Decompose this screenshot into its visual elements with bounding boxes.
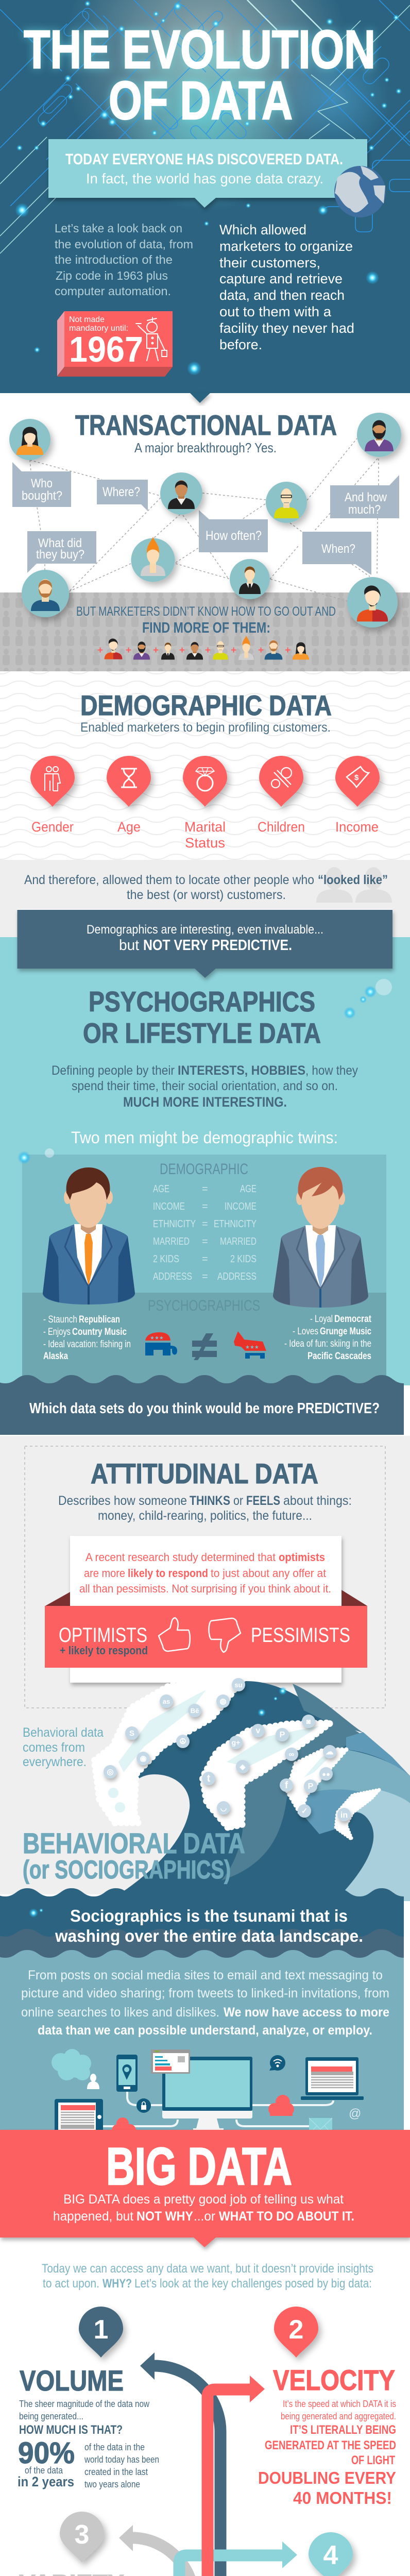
red band: optimists vs pessimists: OPTIMISTS [59,1624,147,1647]
speech bubble: and how much: much? [348,503,381,517]
pin: 1: 1 [94,2315,108,2345]
icon: at sign: @ [349,2107,361,2121]
subheading: A major breakthrough? Yes. [134,440,277,455]
row of people with plus signs: + [126,645,131,656]
icon pin: gender [30,756,75,807]
social icon glyphs: f [285,1780,288,1791]
pin: 4 [309,2532,353,2576]
text block: behavioral data comes from everywhere [23,1725,104,1769]
callout: 1967 box: Not made [69,315,105,324]
icon: lock [136,2098,151,2113]
icon: red cloud right [268,2095,294,2116]
illustration: connected devices [52,2049,364,2137]
text block: intro left: Zip code in 1963 plus [56,269,168,282]
list: right man: - Idea of fun: skiing in the [284,1338,371,1349]
block: volume: of the data [25,2465,63,2476]
headline [55,1906,363,1945]
list: left man: - Staunch [43,1314,77,1325]
text block: THINKS [190,1494,230,1508]
social icon glyphs: ◈ [240,1762,246,1771]
demographic table: DEMOGRAPHIC [160,1161,248,1178]
row of people with plus signs: + [179,645,185,656]
social icon glyphs: in [340,1811,348,1820]
title: OF DATA [109,71,293,131]
figure: left man [43,1167,135,1304]
text block: about things: [283,1494,352,1508]
title [24,20,375,131]
arrows: four branching routes [119,2352,297,2576]
callout: today everyone has discovered data: In fact, the world has gone data crazy. [86,171,323,187]
text block: intro left: Let’s take a look back on [55,222,182,235]
speech bubble: where: Where? [102,485,140,499]
demographic table: ETHNICITY [153,1218,196,1230]
connectors [102,2092,333,2126]
person: bearded purple [357,413,401,457]
callout: 1967 box: 1967 [69,329,143,369]
pin: 1 [79,2307,123,2358]
text block: key challenges: to act upon. [43,2277,99,2291]
row of people with plus signs [97,636,309,660]
heading: behavioral data: BEHAVIORAL DATA [23,1827,245,1859]
study text: A recent research study determined that [86,1551,276,1564]
icon: thumb up [159,1618,190,1651]
icon: envelope [309,2118,332,2134]
white card [70,1536,341,1683]
text block: key challenges: WHY? [102,2277,132,2291]
demographic table: INCOME [225,1201,257,1212]
icon: elephant: ★★★ [150,1335,164,1341]
block: velocity [258,2364,396,2507]
block: volume: 90% [18,2436,75,2470]
foam [94,1680,379,1839]
pin: 3: 3 [75,2520,89,2550]
heading: DEMOGRAPHIC DATA [80,689,332,721]
text block: intro right [219,222,354,352]
headline: washing over the entire data landscape. [55,1926,363,1945]
social icon glyphs: ◎ [107,1768,114,1776]
icon: elephant [145,1332,177,1355]
text block: key challenges [42,2262,373,2291]
study text [79,1551,331,1595]
speech bubble: when: When? [321,542,355,556]
demographic table: = [202,1218,208,1230]
text block: NOT WHY [136,2209,193,2224]
text block: intro right: out to them with a [219,304,332,319]
text block: behavioral data comes from everywhere: comes from [23,1740,85,1755]
subheading: Enabled marketers to begin profiling customers. [80,720,331,735]
pin: 3 [60,2512,104,2563]
social icon glyphs: ◉ [140,1754,147,1763]
list: right man: Grunge Music [320,1326,371,1337]
figure: right man [273,1167,368,1308]
row of people with plus signs: + [205,645,211,656]
study text: to just about any offer at [211,1567,326,1580]
block: volume: two years alone [84,2479,140,2489]
demographic table: = [202,1236,208,1247]
list: left man: - Ideal vacation: fishing in [43,1339,131,1350]
social icon glyphs: ●● [322,1770,330,1778]
list: left man: Country Music [72,1327,127,1337]
social icon glyphs: ✓ [301,1807,308,1816]
row of people with plus signs: + [153,645,159,656]
block: velocity: OF LIGHT [351,2453,395,2467]
list: left man: - Enjoys [43,1327,71,1337]
person: orange hair [131,537,175,582]
icon: chat cloud [52,2049,91,2080]
psychographics label: PSYCHOGRAPHICS [148,1297,260,1314]
callout: 1967 box [57,311,173,377]
person: black suit [230,559,270,599]
demographic table: MARRIED [220,1236,257,1247]
heading: BIG DATA [106,2137,292,2196]
panel: psychographics background [0,937,410,1385]
panel: looked like [0,860,410,937]
text block: And therefore, allowed them to locate other people who [24,873,314,887]
demographic table: 2 KIDS [230,1253,257,1265]
row of people with plus signs: + [97,645,103,656]
panel: twins comparison [18,1148,386,1385]
icon: monitor [162,2057,252,2130]
block: volume: The sheer magnitude of the data now [19,2398,150,2409]
social icon glyphs: ∞ [289,1750,295,1759]
text block [53,2192,354,2224]
person: bald yellow [266,482,307,523]
speech bubble: what did they buy: What did [38,536,82,550]
illustration: tsunami wave [94,1678,410,1901]
text block: key challenges: Let’s look at the key challenges posed by big data: [134,2277,372,2291]
text block: data than we can possible understand, analyze, or employ. [38,2023,372,2038]
text block: defining people: MUCH MORE INTERESTING. [123,1094,287,1110]
panel: attitudinal data [0,1436,410,1894]
glow dots [344,979,392,1019]
row of people with plus signs: + [258,645,264,656]
labels: Gender [31,819,74,835]
social icon glyphs [107,1681,348,1820]
text block: “looked like” [318,873,388,887]
text block: defining people [52,1063,358,1110]
text block [21,1968,389,2038]
demographic table [153,1161,257,1282]
demographic table: ADDRESS [217,1271,257,1282]
speech bubble: where [97,480,148,511]
pin: 2 [274,2307,318,2358]
icon: thumb down [209,1618,241,1652]
text block: intro right: Which allowed [219,222,306,238]
pin: 2: 2 [289,2315,303,2345]
text block: find more of them [76,604,336,636]
text block: WHAT TO DO ABOUT IT. [219,2209,354,2224]
text block: intro left: computer automation. [55,284,171,298]
icon pin: marital status [183,756,227,807]
callout: not very predictive: but [119,937,139,954]
text block: ...or [194,2209,215,2224]
labels: Children [258,819,305,835]
red band: optimists vs pessimists: + likely to respond [60,1644,148,1657]
list: right man: - Loves [293,1326,318,1337]
text block: the best (or worst) customers. [127,888,286,902]
callout: not very predictive [17,909,392,978]
text block: intro right: facility they never had [219,320,354,336]
list: left man: Alaska [43,1351,68,1362]
social icon glyphs: ◙ [306,1717,311,1725]
speech bubble: when [302,532,371,575]
list: left man: Republican [79,1314,120,1325]
demographic table: = [202,1271,208,1282]
social icon glyphs: P [308,1782,314,1791]
text block: find more of them: BUT MARKETERS DIDN’T KNOW HOW TO GO OUT AND [76,604,336,619]
icon: browser window [151,2049,190,2074]
demographic table: ETHNICITY [214,1218,257,1230]
speech bubble: who bought: bought? [22,489,62,503]
study text: optimists [279,1551,325,1564]
arrow: velocity [208,2376,265,2576]
text block: intro right: their customers, [219,255,320,270]
callout: 1967 box: mandatory until: [69,324,128,333]
callout: today everyone has discovered data: TODAY EVERYONE HAS DISCOVERED DATA. [65,151,343,168]
block: volume: in 2 years [18,2474,74,2489]
speech bubble: and how much [330,475,399,518]
social icon glyphs: P [280,1731,285,1739]
icon: not equal [192,1333,217,1360]
demographic table: = [202,1253,208,1265]
labels: Income [335,819,379,835]
text block: From posts on social media sites to email and text messaging to [28,1968,383,1982]
social icon glyphs: su [234,1681,243,1689]
person: red sweater [347,577,398,628]
text block: picture and video sharing; from tweets to linked-in invitations, from [21,1986,389,2001]
block: volume: created in the last [84,2467,148,2477]
icon: person [87,2074,99,2089]
social icon glyphs: ◍ [219,1697,227,1706]
social icon glyphs: ◡ [220,1804,227,1812]
social icon glyphs: g+ [232,1738,240,1747]
icon: red cloud left [112,2117,136,2137]
callout: not very predictive: Demographics are interesting, even invaluable... [87,923,323,937]
speech bubble: how often [199,510,268,552]
list: left man [43,1314,131,1362]
labels: Age [117,819,141,835]
demographic table: 2 KIDS [153,1253,179,1265]
pin: 4: 4 [323,2540,338,2570]
text block: defining people: spend their time, their social orientation, and so on. [72,1079,338,1093]
demographic table: AGE [153,1183,169,1195]
panel: sociographics waves [0,1888,404,2133]
text block: intro right: data, and then reach [219,287,345,303]
panel: grey band [0,592,410,671]
text block: behavioral data comes from everywhere: Behavioral data [23,1725,104,1740]
social icon glyphs: ☁ [326,1748,334,1756]
heading: psychographics: PSYCHOGRAPHICS [89,986,315,1018]
arrow: variety [119,2525,193,2576]
block: volume: being generated... [19,2411,83,2421]
text block: We now have access to more [224,2005,389,2020]
red band: optimists vs pessimists: PESSIMISTS [251,1624,350,1647]
text block: intro right: before. [219,337,262,352]
social icon glyphs: v [256,1726,261,1735]
speech bubble: what did they buy: they buy? [36,548,84,562]
block: velocity: 40 MONTHS! [293,2488,392,2507]
text block: behavioral data comes from everywhere: everywhere. [23,1755,87,1769]
row of people with plus signs: + [285,645,291,656]
text block: intro right: capture and retrieve [219,271,343,286]
speech bubble: what did they buy [27,531,96,573]
social icon glyphs: S [129,1729,134,1738]
icon: donkey [234,1331,266,1359]
icon: laptop [301,2057,364,2100]
block: velocity: DOUBLING EVERY [258,2468,396,2487]
panel: hero background [0,0,410,403]
callout: not very predictive: NOT VERY PREDICTIVE. [143,937,292,954]
text block: FEELS [246,1494,280,1508]
study text: are more [84,1567,125,1580]
panel: transactional data [75,409,337,455]
callout: today everyone has discovered data [48,139,367,208]
demographic table: MARRIED [153,1236,190,1247]
text block: BIG DATA does a pretty good job of telling us what [63,2192,344,2207]
heading: behavioral data [23,1827,245,1884]
heading: behavioral data: (or SOCIOGRAPHICS) [23,1855,231,1884]
text block: intro left [55,222,193,298]
speech bubble: and how much: And how [345,490,387,504]
icon: donkey: ★★★ [245,1345,259,1350]
icon: mr zip [136,317,167,361]
person: dark suit [160,472,202,515]
block: volume: VOLUME [20,2364,124,2397]
heading: psychographics [83,986,321,1049]
block: volume [18,2364,159,2489]
block: volume: of the data in the [84,2442,145,2452]
icon: phone [116,2055,138,2092]
heading: TRANSACTIONAL DATA [75,409,337,441]
heading: psychographics: OR LIFESTYLE DATA [83,1017,321,1049]
icon pin: age [107,756,151,807]
labels [31,819,379,851]
speech bubble: who bought: Who [31,477,53,490]
icon: silhouettes [316,867,392,903]
text block: defining people: , how they [305,1063,358,1078]
speech bubble: how often: How often? [206,529,262,543]
labels: Status [185,835,225,851]
text block: intro left: the evolution of data, from [55,238,193,251]
demographic table: = [202,1183,208,1195]
person: bearded blue [22,570,69,617]
text block [58,1494,352,1523]
headline: Sociographics is the tsunami that is [70,1906,348,1925]
demographic table: ADDRESS [153,1271,192,1282]
text block: happened, but [53,2209,133,2224]
list: right man: Pacific Cascades [308,1351,371,1362]
text block [24,873,388,902]
icon: wifi bubble [269,2055,285,2071]
person: woman orange [9,419,50,460]
text block: money, child-rearing, politics, the future... [98,1509,312,1523]
text block: Describes how someone [58,1494,187,1508]
demographic table: = [202,1201,208,1212]
labels: Marital [184,819,226,835]
text block: or [233,1494,243,1508]
demographic table: INCOME [153,1201,185,1212]
text block: defining people: Defining people by their [52,1063,175,1078]
social icon glyphs: as [163,1698,170,1705]
row of people with plus signs: + [231,645,236,656]
icon pin: income: $ [354,773,359,782]
text block: online searches to likes and dislikes. [21,2005,219,2020]
demographic table: AGE [240,1183,257,1195]
social icons [104,1678,351,1821]
social icon glyphs: ☮ [179,1737,186,1746]
list: right man [284,1314,372,1362]
study text: all than pessimists. Not surprising if you think about it. [79,1582,331,1595]
social icon glyphs: t [207,1773,211,1784]
panel: demographic data [0,671,410,860]
heading: ATTITUDINAL DATA [91,1458,318,1489]
block: volume: HOW MUCH IS THAT? [19,2423,123,2437]
dashed connections [30,438,379,601]
arrow: volume [140,2352,227,2576]
list: right man: - Loyal [310,1314,333,1325]
study text: likely to respond [128,1567,208,1580]
ribbon folds [45,1590,367,1606]
arrow: validity [179,2541,297,2576]
red band: optimists vs pessimists [45,1606,367,1668]
icon pin: children [259,756,303,807]
list: right man: Democrat [334,1314,372,1325]
block: volume: world today has been [84,2454,159,2465]
icon pin: income [335,756,380,807]
speech bubble: who bought [12,462,71,507]
panel: predictive question [0,1375,404,1435]
social icon glyphs: Bē [191,1707,199,1715]
panel: big data [0,2130,410,2247]
text block: find more of them: FIND MORE OF THEM: [142,620,270,636]
heading: two men: Two men might be demographic twins: [71,1128,338,1147]
icon: globe [334,166,386,217]
text block: intro left: the introduction of the [55,253,173,266]
text block: defining people: INTERESTS, HOBBIES [178,1063,305,1078]
text block: intro right: marketers to organize [219,239,353,254]
icon: tablet [55,2099,103,2134]
